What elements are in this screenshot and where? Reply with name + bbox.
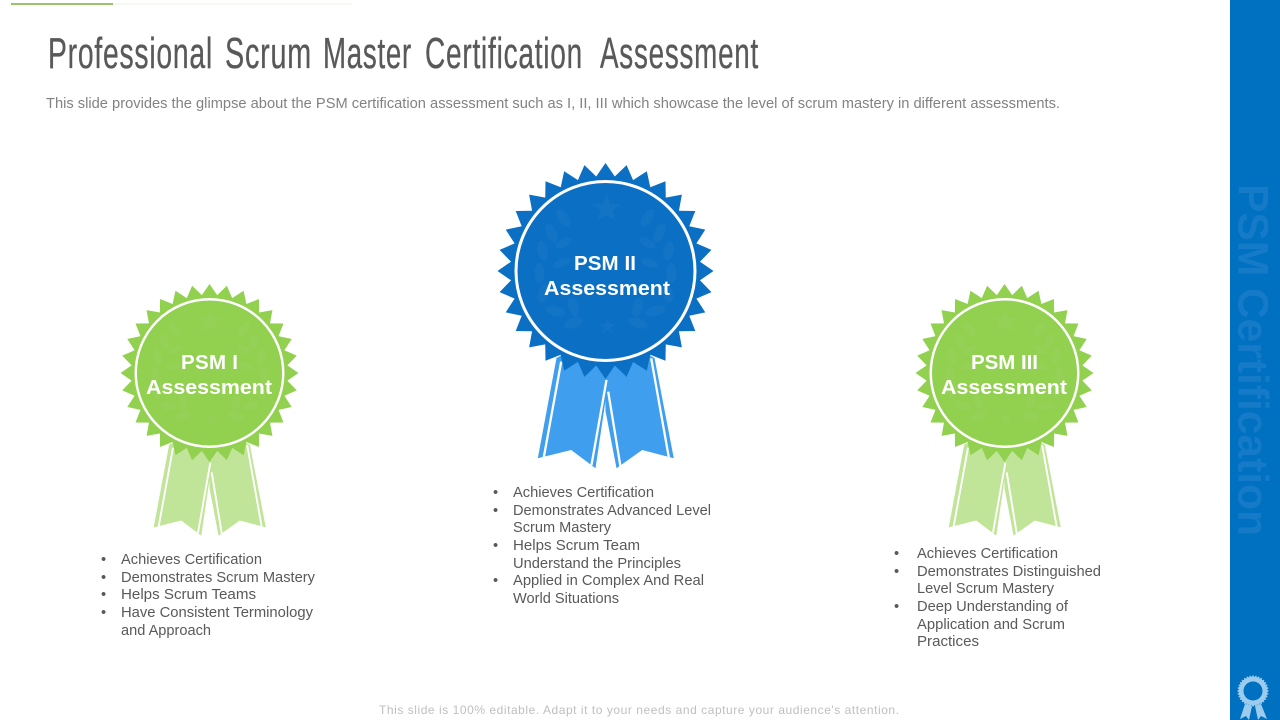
title: Master (323, 29, 412, 78)
text block: PSM II bullets: Achieves Certification (513, 485, 654, 501)
text block: PSM III bullets: • (894, 599, 899, 615)
subtitle: This slide provides the glimpse about the PSM certification assessment such as I, II, III which showcase the level of scrum mastery in different assessments. (46, 96, 1060, 112)
text block: PSM II bullets: World Situations (513, 591, 619, 607)
icon: green rosette (84, 247, 335, 536)
text block: PSM I bullets: Have Consistent Terminology (121, 605, 314, 621)
text block: PSM II bullets: Demonstrates Advanced Level (513, 503, 711, 519)
badge label: PSM III: PSM III (971, 351, 1038, 374)
text block: PSM II bullets: • (493, 538, 498, 554)
text block: PSM II bullets: • (493, 503, 498, 519)
text block: PSM III bullets: • (894, 564, 899, 580)
panel: PSM I badge (84, 247, 335, 536)
text block: PSM I bullets: • (101, 605, 106, 621)
title: Scrum (225, 29, 312, 78)
panel: sidebar (1228, 0, 1280, 720)
text block: PSM II bullets: Applied in Complex And Real (513, 573, 704, 589)
panel: PSM III badge (879, 247, 1130, 536)
panel: PSM II badge (453, 118, 758, 468)
text block: PSM III bullets: • (894, 546, 899, 562)
text block: PSM II bullets: Helps Scrum Team (513, 538, 640, 554)
text block: PSM I bullets: Helps Scrum Teams (121, 587, 256, 603)
text block: PSM I bullets: Achieves Certification (121, 552, 262, 568)
text block: PSM III bullets: Achieves Certification (917, 546, 1058, 562)
text block: PSM I bullets (101, 552, 316, 639)
header accent line (11, 3, 352, 5)
footer note: This slide is 100% editable. Adapt it to your needs and capture your audience's attention. (379, 703, 899, 717)
text block: PSM III bullets: Demonstrates Distinguished (917, 564, 1101, 580)
text block: PSM III bullets: Deep Understanding of (917, 599, 1069, 615)
text block: PSM I bullets: • (101, 552, 106, 568)
title: Assessment (600, 29, 759, 78)
text block: PSM III bullets (894, 546, 1101, 650)
text block: PSM II bullets: • (493, 485, 498, 501)
title: Professional (48, 29, 213, 78)
title: Certification (425, 29, 583, 78)
icon: green rosette (879, 247, 1130, 536)
text block: PSM I bullets: and Approach (121, 623, 211, 639)
badge label: PSM II: PSM II (574, 252, 636, 275)
text block: PSM I bullets: Demonstrates Scrum Mastery (121, 570, 316, 586)
sidebar vertical label: PSM Certification (1228, 184, 1276, 536)
badge label: Assessment: Assessment (146, 376, 272, 399)
text block: PSM II bullets: Understand the Principles (513, 556, 681, 572)
text block: PSM III bullets: Practices (917, 634, 979, 650)
badge label: Assessment: Assessment (941, 376, 1067, 399)
text block: PSM III bullets: Level Scrum Mastery (917, 581, 1055, 597)
icon: medal (1230, 668, 1276, 720)
title (48, 29, 759, 78)
badge label: PSM I: PSM I (181, 351, 238, 374)
text block: PSM II bullets: • (493, 573, 498, 589)
text block: PSM II bullets (493, 485, 711, 607)
icon: blue rosette (453, 118, 758, 468)
badge label: Assessment: Assessment (544, 277, 670, 300)
text block: PSM I bullets: • (101, 570, 106, 586)
text block: PSM I bullets: • (101, 587, 106, 603)
text block: PSM III bullets: Application and Scrum (917, 617, 1065, 633)
text block: PSM II bullets: Scrum Mastery (513, 520, 612, 536)
